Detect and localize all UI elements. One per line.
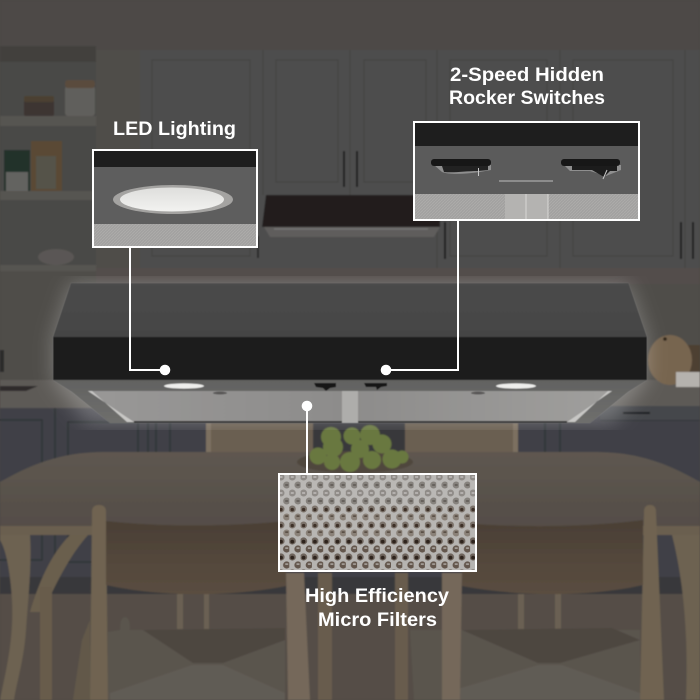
hood top face <box>53 283 647 337</box>
icon: left rocker switch <box>431 159 491 176</box>
floor <box>0 594 700 700</box>
table <box>0 452 700 700</box>
heading: 2-Speed Hidden Rocker Switches <box>449 64 605 109</box>
under-cabinet wall band <box>96 268 700 284</box>
callout: micro filters connector <box>302 401 312 474</box>
brand marking <box>499 180 553 182</box>
main range hood <box>53 283 647 423</box>
hood underside metal <box>53 380 647 423</box>
table legs right <box>672 535 700 700</box>
heading: High Efficiency Micro Filters <box>305 585 449 631</box>
wall <box>0 0 700 420</box>
callout: rocker switches connector <box>381 220 458 375</box>
icon: LED light close-up <box>113 185 233 214</box>
hood LED light right <box>496 383 536 389</box>
hood black front band <box>53 337 647 380</box>
hood glow halo <box>53 283 647 423</box>
sink on counter <box>0 386 38 391</box>
heading: High Efficiency Micro Filters: High Efficiency <box>305 585 449 607</box>
dark recess behind fruit <box>313 423 405 455</box>
faucet <box>0 350 4 372</box>
heading: 2-Speed Hidden Rocker Switches: Rocker Switches <box>449 87 605 109</box>
countertop <box>0 380 700 408</box>
cutting board <box>648 335 700 387</box>
table legs left <box>0 535 31 700</box>
hood LED light left <box>164 383 204 389</box>
icon: right rocker switch <box>561 159 621 179</box>
panel: LED lighting detail <box>93 150 257 247</box>
left chair <box>73 505 332 700</box>
distant range hood <box>262 195 440 237</box>
heading: 2-Speed Hidden Rocker Switches: 2-Speed Hidden <box>450 64 604 86</box>
heading: LED Lighting: LED Lighting <box>113 118 236 140</box>
lower cabinets <box>0 406 700 578</box>
filter edge highlights <box>88 391 612 422</box>
right chair <box>395 505 664 700</box>
filter panel <box>88 391 612 422</box>
distant chairs <box>206 423 518 455</box>
top soffit <box>0 0 700 50</box>
centre bar <box>342 391 358 423</box>
upper cabinets <box>140 50 700 268</box>
panel: rocker switches detail <box>414 122 639 220</box>
open shelves <box>0 46 96 271</box>
panel: micro filter mesh detail <box>279 474 476 571</box>
heading: High Efficiency Micro Filters: Micro Filters <box>318 609 437 631</box>
hood rocker switches <box>314 383 387 391</box>
baseboard <box>0 577 700 594</box>
fruit bowl <box>297 425 413 473</box>
filter latches <box>213 392 485 394</box>
callout: LED Lighting connector <box>130 248 170 375</box>
